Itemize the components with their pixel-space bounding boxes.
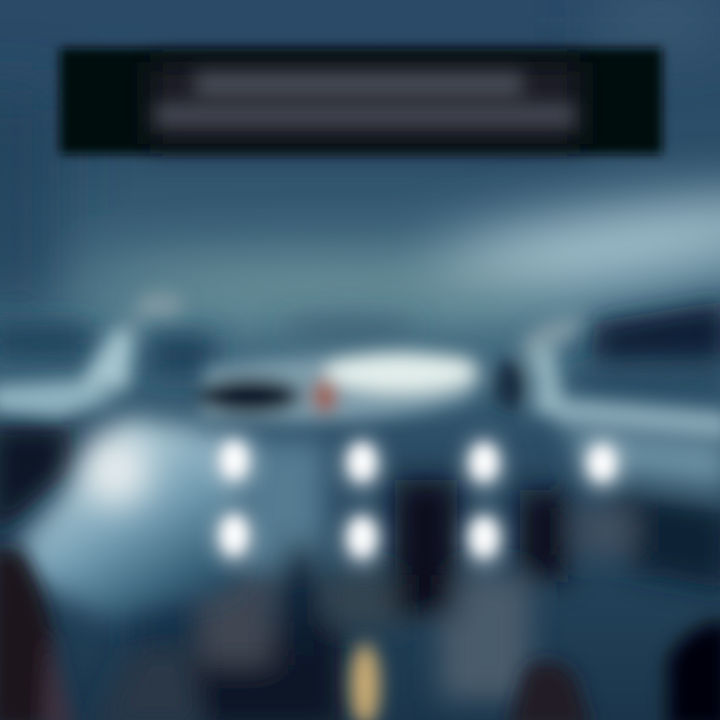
aircraft fuselage <box>200 352 482 422</box>
distant mountains <box>0 300 720 400</box>
lower right dark band <box>560 425 720 590</box>
yellow runway marking <box>350 643 380 720</box>
wing highlight <box>81 434 149 506</box>
left dark ground <box>0 425 75 540</box>
large light wing panel <box>18 420 250 620</box>
mid blue panel <box>130 440 325 660</box>
tail fin left <box>78 293 184 390</box>
aircraft cockpit window <box>198 378 302 414</box>
dot halos <box>214 436 622 567</box>
tail fin right <box>520 315 585 415</box>
light sky glow <box>0 0 720 320</box>
dark lower ground <box>95 610 345 720</box>
orange nose accent <box>314 379 336 413</box>
illegible title line two <box>155 104 575 126</box>
glowing dots bottom row <box>221 516 497 556</box>
center right foreground figure <box>508 661 592 720</box>
horizon light band <box>0 380 720 440</box>
dark engine <box>495 360 525 410</box>
right foreground figure <box>668 622 720 720</box>
banner background <box>60 48 662 154</box>
scene shapes softened together <box>0 300 720 720</box>
illegible title line one <box>195 72 523 98</box>
lower grey panels <box>200 505 635 700</box>
title banner <box>60 48 662 154</box>
dark figures between lights <box>285 480 568 655</box>
left foreground figure <box>0 550 76 720</box>
banner center tint <box>150 62 580 144</box>
sharper scene shapes <box>0 293 720 720</box>
glowing dots top row <box>221 442 615 480</box>
